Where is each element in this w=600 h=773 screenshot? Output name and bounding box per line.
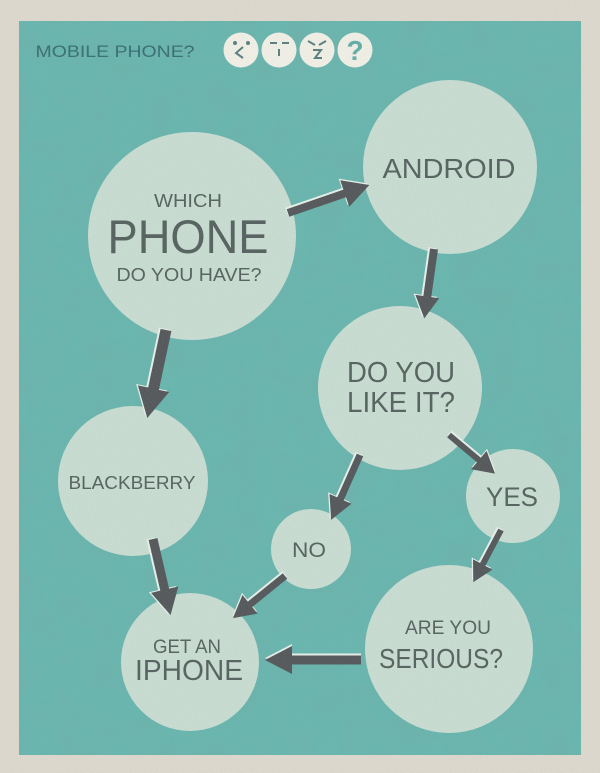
circle: do you like it: DO YOU (347, 357, 455, 389)
circle: blackberry: BLACKBERRY (68, 473, 196, 493)
circle: which phone: DO YOU HAVE? (116, 265, 262, 285)
circle: no (271, 509, 351, 589)
circle: get an iphone: IPHONE (135, 655, 243, 687)
arrow: blackberry to get an iphone (137, 535, 184, 619)
icon: question mark: ? (346, 35, 364, 66)
circle: android: ANDROID (382, 153, 516, 184)
circle: are you serious: SERIOUS? (379, 643, 503, 674)
circle: no: NO (292, 539, 326, 562)
circle: blackberry (58, 406, 208, 556)
circle: which phone: PHONE (108, 210, 268, 263)
header title: MOBILE PHONE? (36, 42, 194, 61)
circle: yes: YES (486, 482, 538, 512)
arrow: which phone to android (282, 170, 374, 227)
icon: frowning face (300, 32, 334, 68)
icon: winking face (224, 32, 258, 68)
circle: android (363, 80, 537, 254)
circle: get an iphone: GET AN (153, 637, 221, 658)
circle: do you like it (318, 306, 482, 470)
icon: question mark (338, 32, 372, 68)
arrow: yes to are you serious (462, 523, 511, 587)
arrow: android to do you like it (410, 246, 446, 320)
circle: do you like it: LIKE IT? (347, 387, 455, 419)
circle: which phone (88, 132, 296, 340)
header icons (224, 32, 372, 68)
circle: get an iphone (121, 593, 259, 731)
circle: are you serious (365, 565, 533, 733)
circle: yes (466, 449, 560, 543)
arrow: which phone to blackberry (130, 325, 182, 421)
arrow: no to get an iphone (224, 564, 293, 627)
arrow: do you like it to yes (441, 424, 504, 483)
circle: which phone: WHICH (154, 191, 222, 211)
arrow: do you like it to no (318, 448, 371, 525)
circle: are you serious: ARE YOU (405, 618, 491, 639)
icon: neutral face (262, 32, 296, 68)
arrow: are you serious to get an iphone (265, 644, 361, 674)
